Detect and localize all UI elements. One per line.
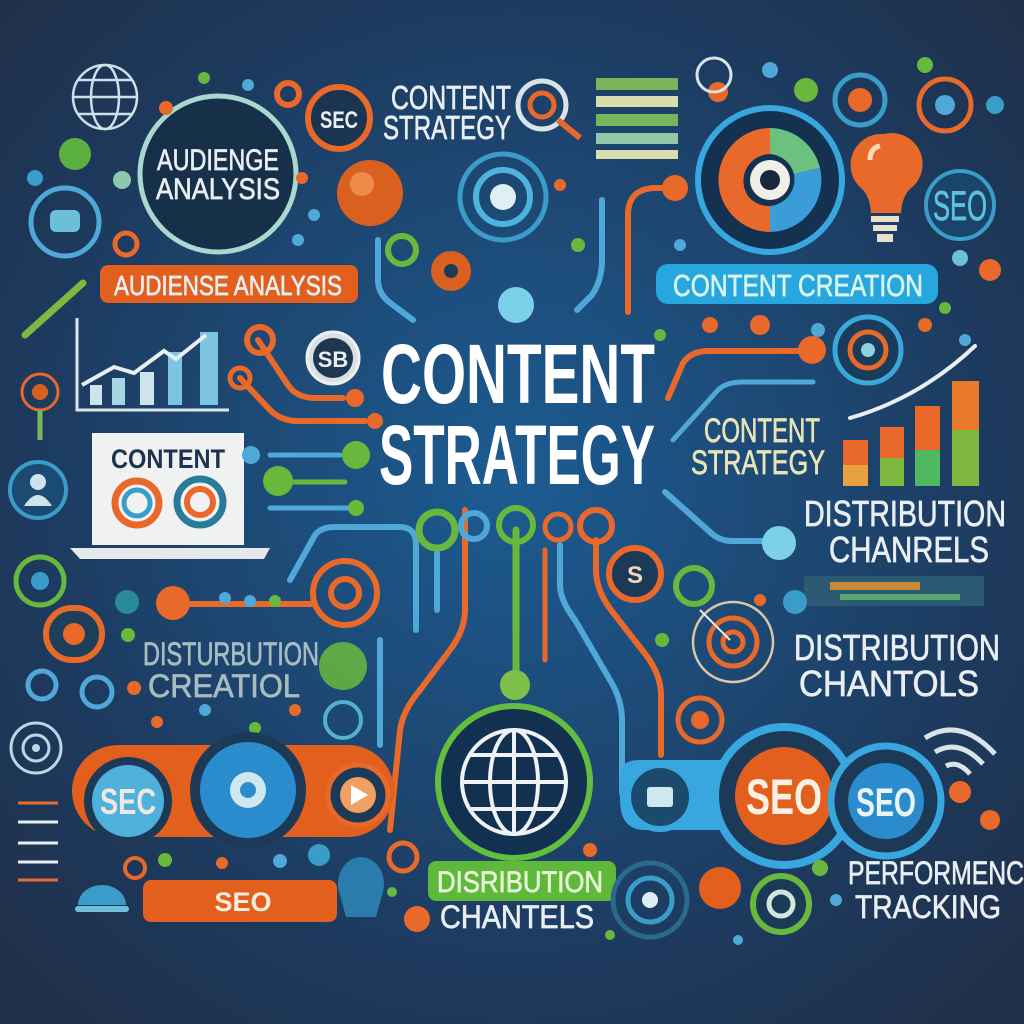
heading: distribution channels right: CHANRELS [829, 529, 989, 570]
panel: audience analysis circle [140, 96, 296, 252]
label: audiense analysis banner [100, 265, 358, 303]
chart: line and bars [77, 318, 229, 410]
icon: pencil [25, 283, 83, 335]
heading: audience analysis badge text: AUDIENGE [157, 144, 279, 177]
label: distribution channels bottom [428, 861, 616, 935]
icon: SB badge [307, 332, 359, 384]
icons left edge [10, 374, 66, 605]
icon: list bars [596, 78, 678, 159]
icon: SB badge: SB [318, 347, 348, 372]
icon: node [798, 336, 826, 364]
heading: content strategy right: STRATEGY [691, 444, 825, 482]
panel: donut chart [698, 108, 842, 252]
icon: target centre [460, 154, 546, 240]
icon: small rings [655, 568, 766, 742]
icon: list lines [18, 803, 58, 880]
band: right smudged row [783, 576, 984, 614]
icon: ring with node right [835, 317, 901, 383]
heading: distribution channels right [804, 493, 1006, 570]
icon: SEO blue circle [926, 171, 994, 239]
icon: S badge: S [627, 562, 643, 589]
label: distribution channels bottom: DISRIBUTION [437, 866, 603, 899]
text: SEO blue: SEO [856, 781, 916, 825]
heading: performance tracking: TRACKING [855, 889, 1001, 925]
icon: magnifier target [518, 81, 580, 138]
icon: circuit nodes left [230, 327, 383, 429]
panel: left mid icons [11, 590, 367, 773]
heading: content strategy top: STRATEGY [383, 109, 511, 146]
heading: content strategy top: CONTENT [391, 79, 511, 116]
label: audiense analysis banner: AUDIENSE ANALYSIS [114, 270, 342, 301]
icon: S badge [609, 548, 661, 600]
panel: globe centre [438, 706, 590, 858]
icon: bottom-left misc [75, 843, 430, 932]
icon: orange sphere [337, 160, 403, 226]
chart: bars right [843, 381, 979, 486]
panel: SEO chain right [620, 727, 941, 865]
icon: bottom right [583, 781, 1000, 945]
heading: content strategy right: CONTENT [704, 412, 820, 450]
icon: SEC badge [308, 87, 370, 149]
label: content creation banner: CONTENT CREATION [673, 268, 923, 303]
icon: SEC badge: SEC [320, 107, 358, 134]
heading: distribution creational: DISTURBUTION [143, 636, 319, 672]
text: SEC badge: SEC [100, 781, 156, 822]
scattered dots top [27, 57, 1004, 346]
label: SEO banner: SEO [214, 887, 272, 917]
icon: light bulb [850, 133, 923, 242]
title [379, 327, 655, 502]
icon: node blue [762, 526, 796, 560]
laptop heading: CONTENT [111, 444, 225, 474]
heading: content strategy right [691, 412, 825, 482]
heading: performance tracking [848, 855, 1024, 925]
panel: audience analysis circle: ANALYSIS [156, 173, 280, 206]
laptop [70, 433, 270, 559]
panel: SEO chain left [72, 732, 394, 848]
heading: content strategy top [383, 79, 511, 146]
circuit nodes centre [156, 441, 612, 700]
heading: distribution creational: CREATIOL [148, 668, 300, 704]
heading: distribution chantols [794, 627, 1000, 704]
heading: distribution creational [143, 636, 319, 704]
icon: target with needle [693, 602, 773, 682]
text: SEO orange: SEO [746, 769, 822, 825]
label: distribution channels bottom: CHANTELS [440, 899, 594, 935]
label: SEO banner [143, 880, 337, 922]
heading: distribution chantols: CHANTOLS [799, 663, 979, 704]
icon: globe top left [73, 65, 137, 129]
icon: SEO blue circle: SEO [933, 182, 987, 229]
title: STRATEGY [379, 408, 655, 502]
icon: wifi arcs [925, 730, 995, 774]
title: CONTENT [381, 327, 655, 421]
connector lines [175, 188, 975, 830]
